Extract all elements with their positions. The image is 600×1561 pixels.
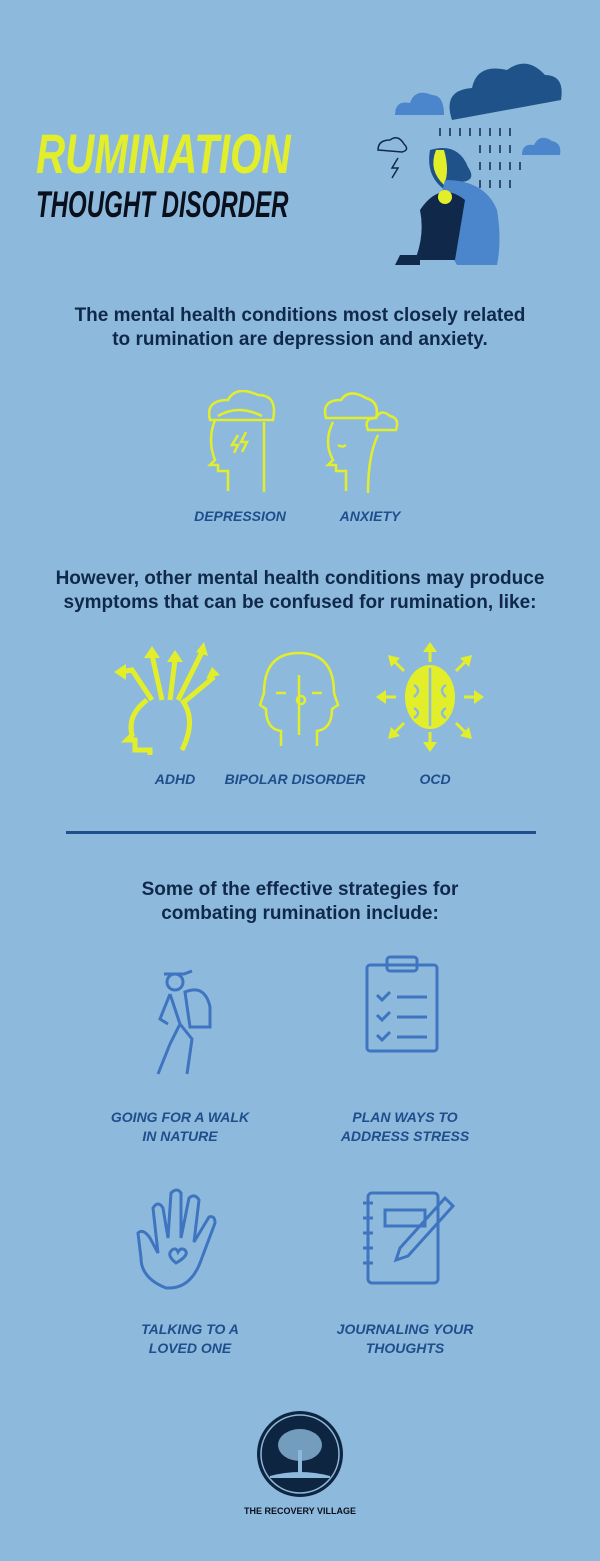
text: other conditions: symptoms that can be confused for rumination, like: [64, 592, 536, 613]
label: journaling [336, 1321, 474, 1356]
label: ADHD: ADHD [155, 771, 195, 787]
icon: plan clipboard [366, 956, 438, 1052]
title: THOUGHT DISORDER [36, 184, 289, 225]
divider [66, 831, 536, 834]
label: anxiety: ANXIETY [340, 508, 400, 524]
intro text: The mental health conditions most closely related [75, 305, 525, 326]
icon: ADHD [114, 642, 220, 755]
icon: anxiety [324, 392, 398, 493]
label: bipolar: BIPOLAR DISORDER [225, 771, 365, 787]
title [36, 122, 292, 225]
label: walk: IN NATURE [142, 1128, 218, 1144]
label: talking: TALKING TO A [141, 1321, 239, 1337]
logo [244, 1411, 356, 1516]
icon: hand [136, 1188, 216, 1290]
logo: THE RECOVERY VILLAGE [244, 1506, 356, 1516]
icon: depression [207, 390, 276, 492]
text: other conditions [56, 568, 544, 613]
intro text: to rumination are depression and anxiety. [112, 329, 488, 350]
illustration: sad person under clouds [377, 64, 562, 265]
label: talking: LOVED ONE [149, 1340, 231, 1356]
icon: OCD [376, 642, 484, 752]
icon: bipolar [258, 652, 340, 746]
text: other conditions: However, other mental health conditions may produce [56, 568, 544, 589]
label: talking [141, 1321, 239, 1356]
text: strategies: Some of the effective strategies for [142, 879, 458, 900]
label: OCD: OCD [419, 771, 451, 787]
label: plan [340, 1109, 469, 1144]
label: depression: DEPRESSION [194, 508, 286, 524]
label: plan: ADDRESS STRESS [341, 1128, 469, 1144]
label: walk [111, 1109, 250, 1144]
intro text [74, 305, 525, 350]
label: journaling: THOUGHTS [366, 1340, 444, 1356]
icon: walk [156, 970, 212, 1074]
label: walk: GOING FOR A WALK [111, 1109, 249, 1125]
text: strategies [142, 879, 458, 924]
title: RUMINATION [36, 122, 291, 185]
label: journaling: JOURNALING YOUR [337, 1321, 473, 1337]
icon: journal [363, 1192, 455, 1284]
text: strategies: combating rumination include: [161, 903, 439, 924]
label: plan: PLAN WAYS TO [352, 1109, 458, 1125]
